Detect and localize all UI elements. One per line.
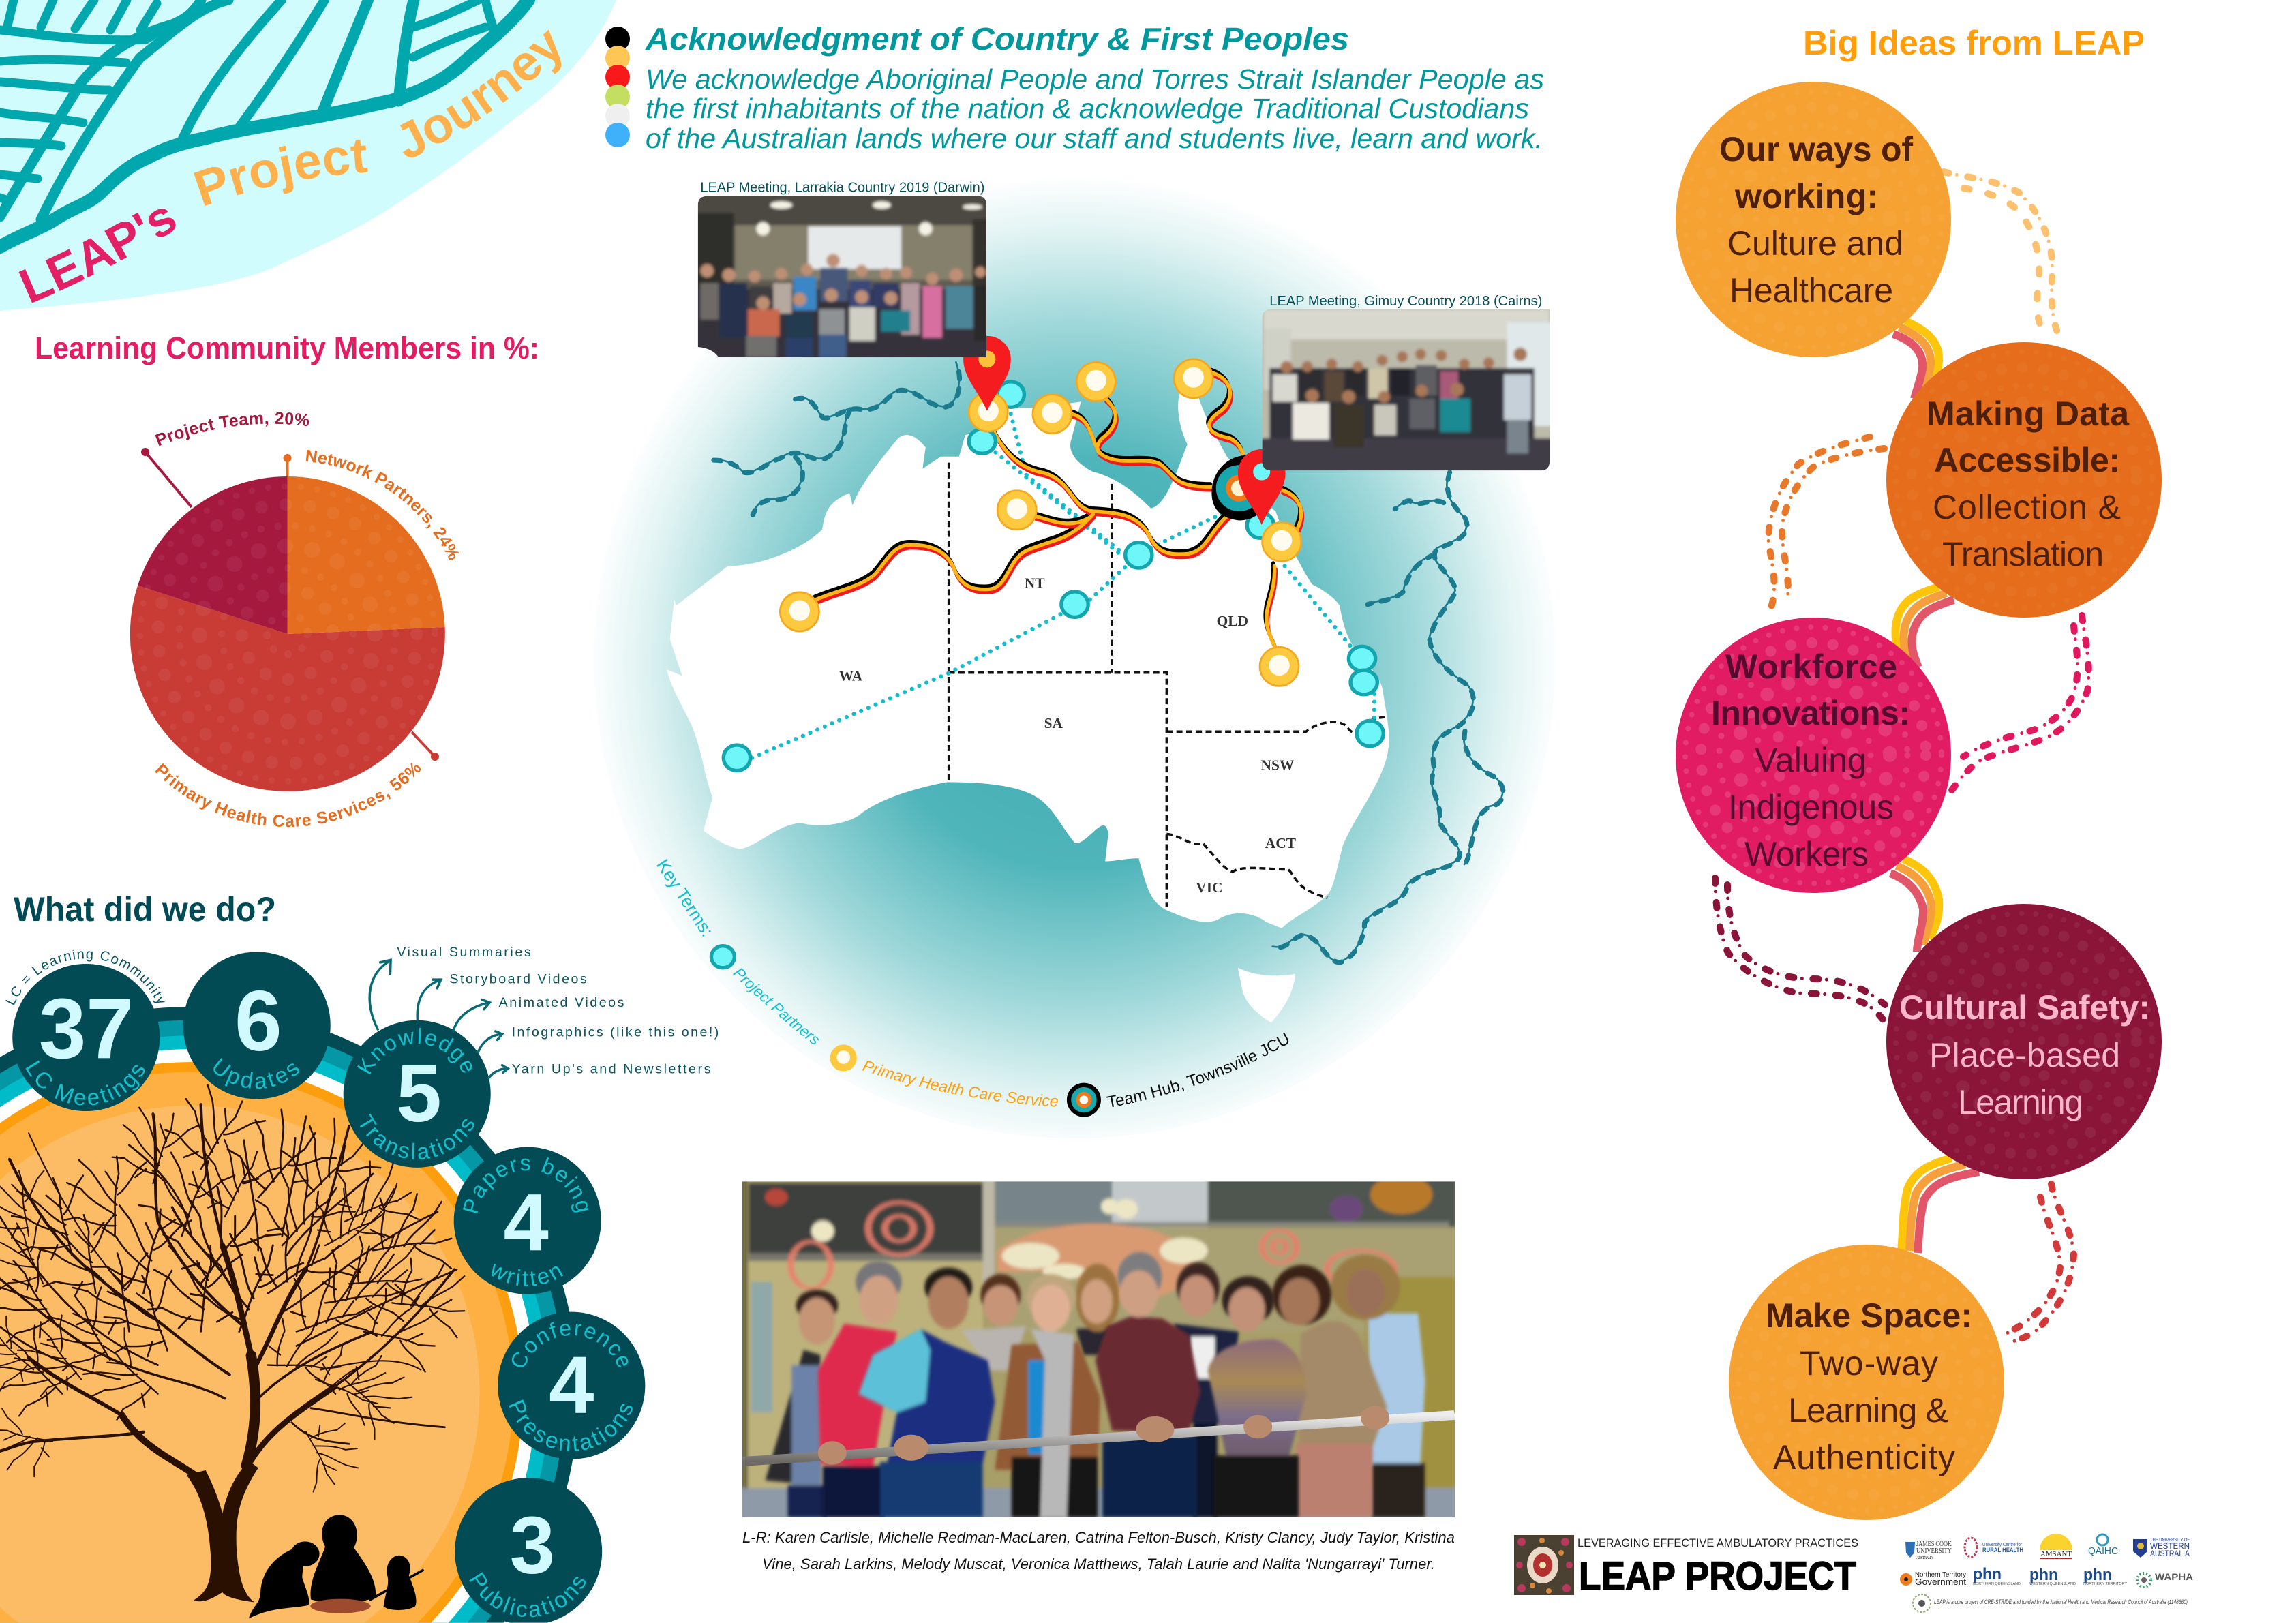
caption: names of team — [742, 1529, 1455, 1573]
big idea: Cultural Safety — [1886, 904, 2162, 1179]
footprints: trail 1 — [1944, 172, 2059, 336]
big idea: Workforce Innovations: Workforce — [1725, 648, 1897, 686]
pie chart: members — [130, 409, 464, 831]
person: Judy — [995, 1274, 1100, 1517]
footprints: trail 4 — [1715, 878, 1885, 1021]
caption: names of team: Vine, Sarah Larkins, Melody Muscat, Veronica Matthews, Talah Laurie and Nalita 'Nungarrayi' Turner. — [762, 1556, 1435, 1573]
achievement: 4 conference presentations: Conference — [505, 1316, 638, 1373]
logo: Northern Territory Government: Northern Territory — [1915, 1571, 1966, 1579]
heading: Learning Community Members: Learning Community Members in %: — [35, 331, 539, 365]
Australia landmass — [667, 378, 1389, 928]
heading: Big Ideas from LEAP: Big Ideas from LEAP — [1803, 24, 2145, 62]
logo: phn Northern Territory: phn — [2083, 1566, 2112, 1584]
header banner: LEAP's Project Journey — [0, 0, 616, 314]
logo: QAIHC: QAIHC — [2088, 1545, 2118, 1557]
person: Michelle — [818, 1261, 902, 1517]
logo: University Centre for Rural Health: University Centre for — [1982, 1543, 2023, 1547]
funding statement: LEAP is a core project of CRE-STRIDE and funded by the National Health and Medical Research Council of Australia (1148660) — [1934, 1598, 2188, 1605]
logo: CRE-STRIDE emblem — [1913, 1594, 1931, 1612]
big idea: Our ways of working: Our ways of — [1719, 130, 1913, 168]
state labels — [839, 575, 1296, 896]
text: acknowledgment statement — [646, 63, 1544, 154]
logo: WAPHA: WAPHA — [2155, 1571, 2193, 1582]
logo: WAPHA — [2137, 1571, 2193, 1587]
big idea: Make Space: Authenticity — [1773, 1438, 1955, 1476]
note: LC = Learning Community — [3, 947, 169, 1037]
achievement: 4 conference presentations: Presentations — [504, 1396, 639, 1456]
footprints: trail 2 — [1768, 437, 1884, 611]
text: Leveraging Effective Ambulatory Practices: LEVERAGING EFFECTIVE AMBULATORY PRACTICES — [1577, 1536, 1858, 1549]
logo: Northern Territory Government: Government — [1915, 1577, 1966, 1587]
photo: Darwin meeting group — [698, 196, 986, 357]
state labels: WA — [839, 667, 863, 684]
big idea: Workforce Innovations: Valuing — [1755, 741, 1867, 779]
partner logos — [1900, 1534, 2193, 1612]
big idea: Our ways of working: Culture and — [1727, 224, 1903, 262]
logo: University Centre for Rural Health: RURAL HEALTH — [1982, 1547, 2023, 1553]
logo: University of Western Australia — [2133, 1538, 2190, 1558]
rainbow service routes — [815, 369, 1302, 654]
logo: James Cook University: AUSTRALIA — [1916, 1556, 1934, 1560]
text: LEAP PROJECT: LEAP PROJECT — [1579, 1554, 1856, 1598]
person: Veronica — [1208, 1276, 1306, 1517]
map pin: Cairns — [1238, 449, 1286, 525]
caption: names of team: L-R: Karen Carlisle, Michelle Redman-MacLaren, Catrina Felton-Busch, Kristy Clancy, Judy Taylor, Kristina — [742, 1529, 1455, 1546]
title word: Journey: Journey — [399, 30, 562, 157]
photo: LEAP team at railing — [734, 1175, 1466, 1522]
achievement: 4 papers being written — [454, 1147, 601, 1294]
achievement: 5 knowledge translations: Translations — [352, 1110, 481, 1164]
icon: family seated under tree — [249, 1515, 424, 1618]
logo: University of Western Australia: WESTERN — [2150, 1541, 2190, 1551]
list: knowledge translation outputs: Yarn Up's and Newsletters — [512, 1062, 711, 1077]
primary health care service nodes — [780, 359, 1301, 686]
logo: LEAP artwork square — [1514, 1535, 1574, 1595]
logo: phn Northern Territory — [2083, 1566, 2128, 1586]
label: Network Partners: Network Partners, 24% — [305, 450, 459, 560]
railing — [742, 1415, 1455, 1461]
text: acknowledgment statement: the first inhabitants of the nation & acknowledge Traditional Custodians — [646, 93, 1529, 124]
logo: James Cook University: JAMES COOK — [1916, 1541, 1952, 1548]
list: knowledge translation outputs: Animated Videos — [499, 995, 624, 1010]
key terms legend — [652, 856, 1293, 1117]
footprints: trail 5 — [1999, 1184, 2074, 1341]
achievement: 4 papers being written: Papers being — [458, 1151, 597, 1216]
achievement: 6 updates: 6 — [235, 974, 282, 1069]
logo: AMSANT — [2040, 1534, 2072, 1559]
key: team hub label: Team Hub, Townsville JCU — [1106, 1029, 1293, 1112]
dotted partner links — [752, 414, 1374, 758]
logo: James Cook University: UNIVERSITY — [1916, 1547, 1952, 1555]
achievement: 6 updates: Updates — [213, 1058, 299, 1089]
label: Project Team: Project Team, 20% — [155, 412, 309, 446]
big idea: Make Space: Two-way — [1800, 1344, 1938, 1382]
title word: LEAP's: LEAP's — [19, 209, 176, 303]
key term heading: Key Terms: — [652, 856, 716, 940]
achievement: 5 knowledge translations — [344, 1020, 491, 1168]
state labels: NT — [1025, 575, 1044, 592]
icon: tree silhouette — [0, 1085, 487, 1602]
big idea: Cultural Safety: Place-based — [1929, 1036, 2120, 1074]
arrows: knowledge translation outputs — [369, 960, 508, 1078]
logo: phn Northern Territory: NORTHERN TERRITORY — [2083, 1582, 2128, 1586]
list: knowledge translation outputs — [397, 945, 719, 1077]
achievement: 6 updates — [183, 952, 331, 1099]
list: knowledge translation outputs: Storyboard Videos — [449, 972, 587, 987]
big idea: Make Space — [1729, 1245, 2004, 1520]
footprints: trail 3 — [1948, 616, 2089, 795]
person: Catrina — [858, 1268, 995, 1517]
achievement: 4 conference presentations — [498, 1312, 645, 1459]
big idea: Making Data Accessible: Translation — [1942, 535, 2104, 573]
big idea: Workforce Innovations: Workers — [1744, 835, 1869, 873]
icon: coolamon dish — [310, 1599, 371, 1613]
state borders — [949, 463, 1388, 907]
logo: University of Western Australia: THE UNIVERSITY OF — [2150, 1538, 2190, 1543]
label: Primary Health Care Services: Primary Health Care Services, 56% — [155, 762, 421, 828]
person: Sarah — [1096, 1252, 1200, 1517]
logo: University of Western Australia: AUSTRALIA — [2150, 1549, 2190, 1558]
achievement: 3 publications: Publications — [464, 1568, 592, 1622]
key: project partner icon — [711, 946, 734, 968]
logo: James Cook University — [1905, 1541, 1952, 1560]
big idea: Making Data Accessible: Making Data — [1927, 395, 2130, 433]
title word: Project: Project — [194, 139, 368, 206]
rivers — [712, 362, 1503, 962]
logo: QAIHC — [2088, 1534, 2118, 1557]
note: LC = Learning Community: LC = Learning Community — [5, 949, 165, 1005]
logo: phn Northern Queensland: NORTHERN QUEENSLAND — [1973, 1582, 2021, 1586]
big idea: Make Space: Learning & — [1788, 1391, 1948, 1429]
caption: Cairns meeting: LEAP Meeting, Gimuy Country 2018 (Cairns) — [1269, 293, 1542, 309]
project partner nodes — [723, 382, 1383, 770]
caption: Darwin meeting: LEAP Meeting, Larrakia Country 2019 (Darwin) — [700, 179, 984, 195]
achievement: 4 papers being written: 4 — [503, 1177, 549, 1268]
big idea: Making Data Accessible: Collection & — [1933, 488, 2121, 526]
achievement: 37 LC meetings — [12, 964, 160, 1111]
state labels: SA — [1044, 715, 1063, 731]
logo: phn Northern Queensland — [1973, 1565, 2021, 1586]
logo: AMSANT: AMSANT — [2040, 1550, 2072, 1558]
achievement: 37 LC meetings: 37 — [39, 982, 134, 1076]
state labels: VIC — [1196, 879, 1223, 896]
logo: phn Northern Queensland: phn — [1973, 1565, 2002, 1583]
key: primary health care label: Primary Health Care Service — [860, 1057, 1059, 1110]
person: Talah — [1272, 1265, 1387, 1517]
map pin: Darwin — [963, 336, 1011, 411]
state labels: QLD — [1217, 613, 1248, 629]
text: acknowledgment statement: of the Australian lands where our staff and students live, learn and work. — [646, 123, 1543, 154]
key: primary health care icon — [830, 1044, 857, 1072]
achievement: 4 papers being written: written — [485, 1256, 569, 1291]
logo: University Centre for Rural Health — [1965, 1538, 2023, 1557]
achievement: 3 publications: 3 — [510, 1500, 555, 1591]
key: project partners label: Project Partners — [730, 964, 824, 1048]
logo: phn Western Queensland: WESTERN QUEENSLAND — [2029, 1582, 2076, 1586]
big idea: Our ways of working: Healthcare — [1729, 271, 1893, 309]
state labels: NSW — [1261, 757, 1295, 774]
person: Karen — [766, 1290, 838, 1517]
logo: phn Western Queensland — [2029, 1566, 2076, 1586]
person: Kristina and Kristy — [961, 1264, 1119, 1371]
team hub node — [1211, 455, 1270, 520]
logo: Northern Territory Government — [1900, 1571, 1966, 1587]
big idea: Our ways of working — [1676, 82, 1951, 357]
Tasmania — [1238, 968, 1295, 1022]
logo: phn Western Queensland: phn — [2029, 1566, 2058, 1584]
achievement: 3 publications — [455, 1478, 602, 1623]
panel: map of Australia — [603, 179, 1550, 1136]
big idea: Make Space: Make Space: — [1766, 1296, 1972, 1335]
rainbow connectors between ideas — [1890, 321, 1979, 1253]
person: Melody — [1174, 1262, 1239, 1517]
state labels: ACT — [1265, 835, 1296, 851]
achievement: 4 conference presentations: 4 — [549, 1340, 594, 1431]
big idea: Cultural Safety: Learning — [1958, 1083, 2083, 1121]
achievement: 5 knowledge translations: 5 — [396, 1048, 442, 1139]
person: Nalita — [1331, 1255, 1425, 1517]
text: acknowledgment statement: We acknowledge Aboriginal People and Torres Strait Islander People as — [646, 63, 1544, 95]
big idea: Making Data Accessible — [1886, 342, 2162, 618]
panel: what did we do sun and achievements — [0, 945, 719, 1623]
big idea: Workforce Innovations: Indigenous — [1728, 788, 1894, 826]
big idea: Making Data Accessible: Accessible: — [1934, 441, 2120, 479]
photo: Cairns meeting group — [1263, 309, 1550, 470]
list: knowledge translation outputs: Infographics (like this one!) — [512, 1025, 719, 1040]
list: knowledge translation outputs: Visual Summaries — [397, 945, 531, 960]
key: team hub icon — [1067, 1083, 1101, 1117]
heading: What did we do?: What did we do? — [14, 890, 276, 928]
achievement: 5 knowledge translations: Knowledge — [357, 1028, 472, 1074]
achievement: 37 LC meetings: LC Meetings — [26, 1061, 145, 1106]
big idea: Workforce Innovations — [1676, 618, 1951, 893]
big idea: Cultural Safety: Cultural Safety: — [1899, 988, 2150, 1027]
big idea: Workforce Innovations: Innovations: — [1711, 694, 1910, 732]
acknowledgment colour dots — [605, 27, 630, 147]
heading: Acknowledgment of Country: Acknowledgment of Country & First Peoples — [645, 21, 1349, 57]
big idea: Our ways of working: working: — [1734, 177, 1878, 215]
